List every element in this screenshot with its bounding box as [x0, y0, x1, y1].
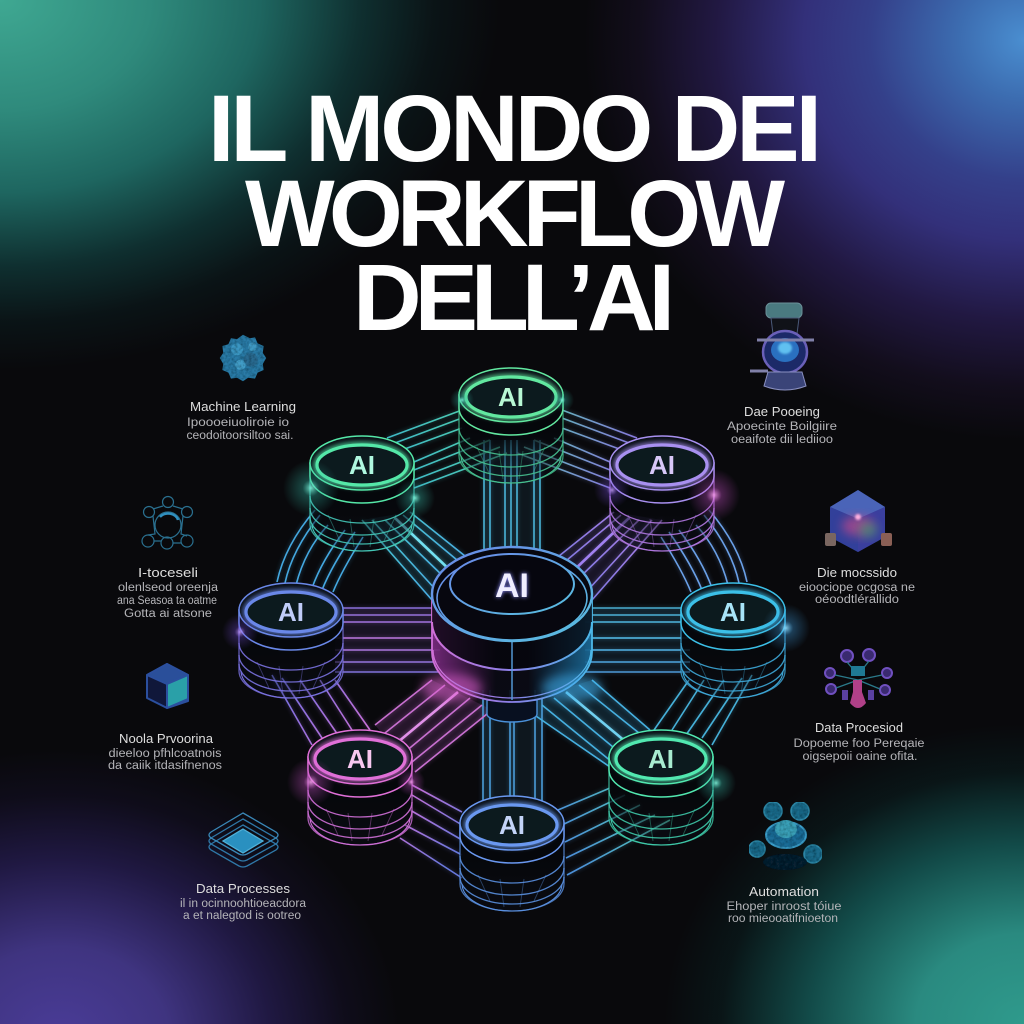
description: Gotta ai atsone	[124, 608, 212, 620]
band glow	[272, 410, 752, 878]
icon: glass reactor	[750, 303, 814, 390]
icon: molecular sphere	[220, 335, 266, 381]
title: IL MONDO DEI	[208, 76, 822, 182]
node: upper right	[610, 436, 714, 551]
icon: node network	[142, 496, 193, 549]
panel: Machine Learning	[186, 335, 296, 442]
description	[186, 417, 294, 442]
node: upper left	[310, 436, 414, 551]
label: Data Processes	[196, 882, 290, 896]
description: oeaifote dii lediioo	[731, 434, 833, 446]
node: right	[681, 583, 785, 698]
label: Dae Pooeing	[744, 405, 820, 419]
node: right: AI	[720, 597, 746, 627]
label: Automation	[749, 885, 819, 899]
title: WORKFLOW	[245, 161, 785, 267]
glow flares	[222, 388, 810, 806]
description: eioociope ocgosa ne	[799, 582, 915, 594]
icon: automation cluster	[749, 802, 822, 870]
description	[108, 748, 222, 772]
node: top	[459, 368, 563, 483]
central node: AI	[495, 567, 529, 605]
description	[180, 898, 307, 922]
node: left	[239, 583, 343, 698]
description: oigsepoii oaine ofita.	[802, 751, 918, 763]
panel: Die mocssido	[799, 490, 915, 606]
label: I-toceseli	[138, 566, 198, 580]
central node: AI	[495, 567, 529, 605]
icon: glowing cube	[825, 490, 892, 552]
panel: Noola Prvoorina	[108, 664, 222, 772]
icon: node flower	[825, 649, 892, 708]
description: Apoecinte Boilgiire	[727, 421, 837, 433]
description: Ipoooeiuoliroie io	[187, 417, 289, 429]
icon: cube	[147, 664, 188, 708]
description: Ehoper inroost tóiue	[726, 901, 842, 913]
label: Die mocssido	[817, 566, 897, 580]
description: oéoodtlérallido	[815, 594, 899, 606]
description: a et nalegtod is ootreo	[183, 910, 301, 922]
workflow network diagram	[222, 368, 810, 911]
description: roo mieooatifnioeton	[728, 913, 838, 925]
node: top: AI	[498, 382, 524, 412]
central node	[422, 547, 602, 722]
icon: layered chip	[209, 813, 278, 867]
title	[208, 76, 822, 351]
connection band fills	[335, 440, 690, 805]
description	[799, 582, 915, 606]
description: ceodoitoorsiltoo sai.	[186, 430, 294, 442]
label: Machine Learning	[190, 400, 296, 414]
node: lower left: AI	[347, 744, 373, 774]
description	[117, 582, 219, 620]
node: lower right	[609, 730, 713, 845]
node: lower right: AI	[648, 744, 674, 774]
panel: I-toceseli	[117, 496, 219, 620]
node: upper left: AI	[349, 450, 375, 480]
node: upper right: AI	[649, 450, 675, 480]
description	[794, 738, 924, 763]
panel: Dae Pooeing	[727, 303, 837, 446]
description: Dopoeme foo Pereqaie	[794, 738, 924, 750]
description	[726, 901, 842, 925]
node: left: AI	[278, 597, 304, 627]
description	[727, 421, 837, 446]
panel: Data Procesiod	[794, 649, 924, 763]
panel: Data Processes	[180, 813, 307, 922]
description: da caiik itdasifnenos	[108, 760, 222, 772]
description: il in ocinnoohtioeacdora	[180, 898, 307, 910]
panel: Automation	[726, 802, 842, 925]
label: Data Procesiod	[815, 721, 903, 735]
label: Noola Prvoorina	[119, 732, 213, 746]
node: bottom: AI	[499, 810, 525, 840]
description: ana Seasoa ta oatme	[117, 595, 217, 607]
description: dieeloo pfhlcoatnois	[108, 748, 222, 760]
connection bands between nodes	[272, 410, 752, 878]
node: lower left	[308, 730, 412, 845]
description: olenlseod oreenja	[118, 582, 219, 594]
title: DELL’AI	[353, 245, 675, 351]
node: bottom	[460, 796, 564, 911]
